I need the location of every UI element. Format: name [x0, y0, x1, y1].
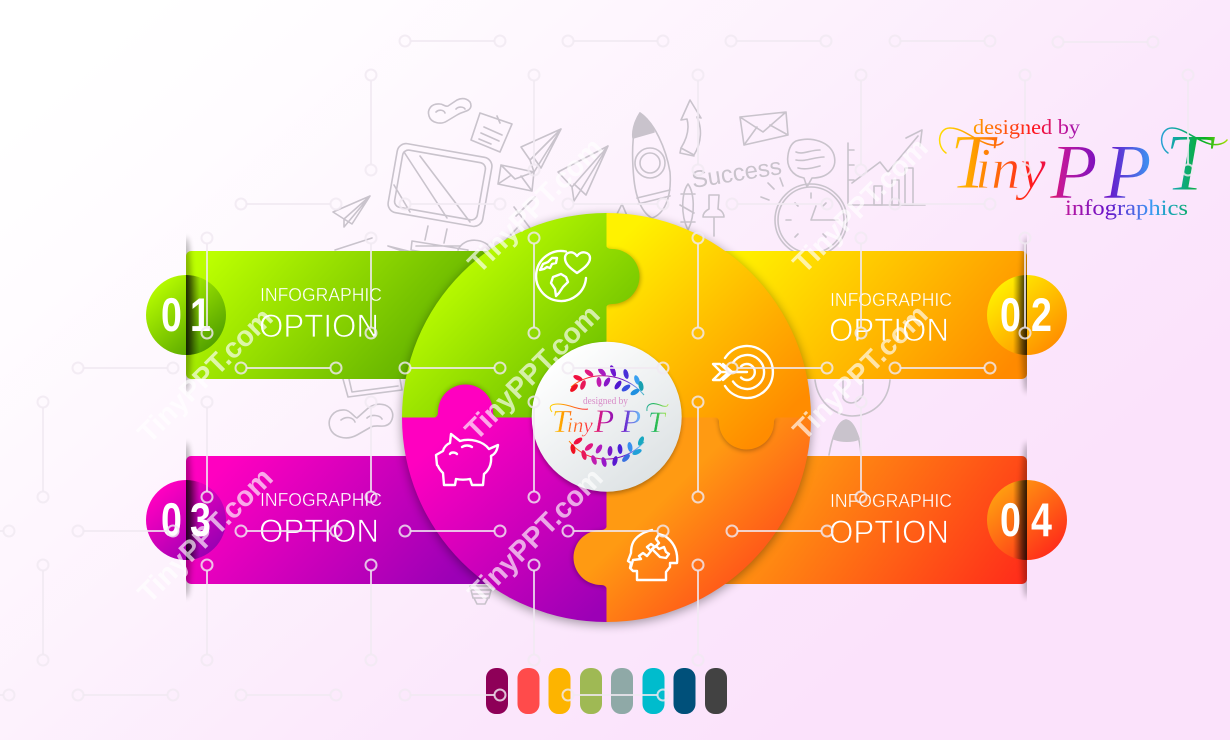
- puzzle piece: magenta: [400, 418, 606, 624]
- puzzle tab: magenta: [432, 383, 499, 418]
- logo: Tiny PPT script: iny: [975, 136, 1046, 201]
- logo: Tiny PPT script: T: [950, 118, 998, 205]
- text: option 03: OPTION: [259, 513, 379, 549]
- doodle: envelope two: [740, 112, 788, 145]
- badge: 04: 0: [1000, 494, 1021, 547]
- doodle: speech bubble: [788, 139, 835, 187]
- logo: designed by: designed by: [973, 115, 1081, 139]
- puzzle piece: yellow: [606, 210, 812, 418]
- doodle sketches behind the puzzle: [329, 99, 925, 604]
- badge: 03: 0: [161, 494, 182, 547]
- logo: infographics: infographics: [1065, 195, 1188, 220]
- colour swatches: [486, 668, 727, 714]
- panel: option 02 bar: [610, 251, 1027, 379]
- puzzle tab: green: [606, 244, 640, 310]
- icon: earth with heart: [536, 251, 590, 301]
- top-right logo: [940, 115, 1227, 220]
- icon: target and arrow: [713, 346, 773, 398]
- doodle: pushpin: [703, 195, 724, 236]
- badge: 02: [987, 237, 1067, 393]
- badge: 03: [146, 442, 226, 598]
- doodle: big paper plane: [558, 146, 608, 201]
- text: option 02: [829, 290, 952, 348]
- doodle: small plane left: [333, 196, 370, 227]
- watermarks: TinyPPT.com: [462, 462, 610, 610]
- text: option 01: INFOGRAPHIC: [260, 285, 382, 305]
- doodle: pin: [506, 197, 535, 240]
- doodle: dome behind circle: [458, 240, 492, 250]
- logo: Tiny PPT script: P: [620, 404, 641, 440]
- watermarks: TinyPPT.com: [132, 302, 280, 450]
- logo: Tiny PPT script: T: [552, 403, 572, 439]
- logo: Tiny PPT script: T: [648, 406, 667, 439]
- watermarks: TinyPPT.com: [462, 132, 610, 280]
- badge: 02: 0: [1000, 289, 1021, 342]
- badge: 01: 1: [190, 289, 211, 342]
- badge: 04: 4: [1031, 494, 1052, 547]
- doodle: paper plane: [521, 129, 561, 172]
- logo: Tiny PPT script: P: [593, 404, 614, 440]
- puzzle tab: orange: [572, 524, 607, 592]
- doodle: curved arrow: [680, 100, 701, 156]
- watermarks: TinyPPT.com: [132, 462, 280, 610]
- doodle: infinity lower: [329, 404, 393, 438]
- text: option 02: INFOGRAPHIC: [830, 290, 952, 310]
- doodle: small rocket: [681, 184, 695, 230]
- watermarks: [132, 132, 935, 610]
- watermarks: TinyPPT.com: [459, 299, 607, 447]
- doodle: envelope: [498, 165, 534, 191]
- text: option 04: OPTION: [829, 514, 949, 550]
- badge: 01: [146, 237, 226, 393]
- doodle: rocket: [616, 113, 694, 218]
- puzzle piece: green: [400, 210, 606, 418]
- text: option 02: OPTION: [829, 312, 949, 348]
- puzzle tab: yellow: [713, 417, 780, 451]
- watermarks: TinyPPT.com: [787, 299, 935, 447]
- doodle: plane behind green bar: [335, 238, 372, 250]
- centre white circle logo: [532, 342, 682, 494]
- doodle: growth chart: [848, 130, 925, 205]
- doodle: lightbulb: [470, 586, 492, 604]
- logo: top laurel: [569, 365, 644, 397]
- logo: Tiny PPT script: P: [1103, 128, 1152, 215]
- text: option 04: [829, 491, 952, 550]
- doodle: note: [471, 113, 512, 152]
- badge: 02: 2: [1031, 289, 1052, 342]
- doodle: clock: [761, 178, 847, 256]
- panel: option 04 bar: [610, 456, 1027, 584]
- puzzle circle: [400, 210, 812, 625]
- logo: Tiny PPT script: iny: [567, 413, 593, 437]
- doodle: monitor: [386, 142, 493, 268]
- icon: head with puzzle: [628, 530, 677, 580]
- doodle: round emblem: [815, 380, 890, 416]
- badge: 03: 3: [190, 494, 211, 547]
- doodle: document under green bar: [343, 379, 402, 397]
- doodle: success word: Success: [690, 153, 784, 194]
- text: option 04: INFOGRAPHIC: [830, 491, 952, 511]
- logo: script swashes: [550, 404, 668, 412]
- text: option 03: [259, 490, 382, 549]
- doodle: rocket tip: [829, 420, 861, 455]
- panel: option 03 bar: [186, 456, 610, 584]
- watermarks: TinyPPT.com: [787, 132, 935, 280]
- logo: Tiny PPT script: P: [1049, 128, 1098, 215]
- logo: script swashes: [940, 128, 1227, 153]
- panel: option 01 bar: [186, 251, 610, 379]
- badge: 01: 0: [161, 289, 182, 342]
- doodle: infinity: [428, 99, 471, 123]
- logo: bottom laurel: [569, 435, 645, 467]
- logo: Tiny PPT script: T: [1165, 117, 1216, 208]
- logo: designed by: designed by: [583, 395, 628, 407]
- badge: 04: [987, 442, 1067, 598]
- puzzle piece: orange: [606, 418, 812, 624]
- text: option 01: OPTION: [259, 308, 379, 344]
- text: option 01: [259, 285, 382, 344]
- text: option 03: INFOGRAPHIC: [260, 490, 382, 510]
- icon: piggy bank: [436, 434, 498, 485]
